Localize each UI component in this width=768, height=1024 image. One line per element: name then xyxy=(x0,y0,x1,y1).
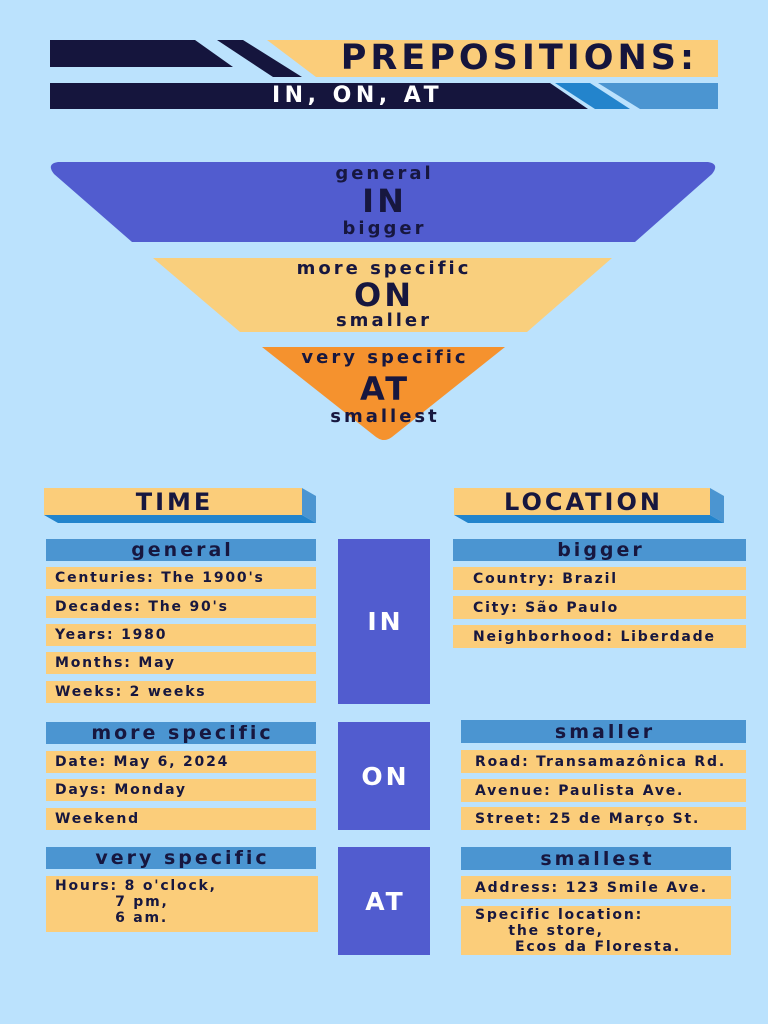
ON location block: Road: Transamazônica Rd. xyxy=(475,754,726,770)
AT location block: Specific location: the store, Ecos da Floresta. xyxy=(475,907,681,955)
funnel: ON: smaller xyxy=(336,310,432,331)
AT location block: Address: 123 Smile Ave. xyxy=(475,880,708,896)
AT column xyxy=(338,847,430,955)
AT column: AT xyxy=(365,886,406,916)
IN column xyxy=(338,539,430,704)
funnel: AT xyxy=(262,347,505,440)
IN time block: Months: May xyxy=(55,655,176,671)
funnel: IN: bigger xyxy=(343,218,426,239)
ON location block: smaller xyxy=(555,720,655,742)
ON column xyxy=(338,722,430,830)
IN location block xyxy=(453,539,746,648)
funnel: ON xyxy=(153,258,612,332)
title text: PREPOSITIONS: xyxy=(341,38,698,78)
header: TIME: TIME xyxy=(136,488,213,516)
IN time block: Centuries: The 1900's xyxy=(55,570,265,586)
IN column: IN xyxy=(367,607,404,636)
funnel: IN: general xyxy=(335,163,434,184)
AT time block xyxy=(46,847,318,932)
ON location block: Avenue: Paulista Ave. xyxy=(475,782,684,798)
ON time block: Weekend xyxy=(55,811,140,827)
IN location block: bigger xyxy=(557,539,645,561)
funnel: AT: AT xyxy=(360,370,410,408)
AT location block xyxy=(461,847,731,955)
IN time block: Decades: The 90's xyxy=(55,599,229,615)
header: TIME xyxy=(44,488,316,523)
ON time block: Days: Monday xyxy=(55,782,187,798)
ON time block: Date: May 6, 2024 xyxy=(55,754,229,770)
ON location block: Street: 25 de Março St. xyxy=(475,810,700,826)
IN time block: Years: 1980 xyxy=(55,627,167,643)
funnel: ON: ON xyxy=(354,276,414,314)
funnel: IN xyxy=(50,162,716,242)
ON location block xyxy=(461,720,746,830)
AT time block: very specific xyxy=(95,847,270,869)
subtitle: IN, ON, AT xyxy=(272,83,443,108)
title banner xyxy=(50,38,718,109)
ON column: ON xyxy=(361,762,410,790)
IN time block xyxy=(46,539,316,703)
IN time block: Weeks: 2 weeks xyxy=(55,684,206,700)
ON time block: more specific xyxy=(91,722,274,744)
funnel: AT: very specific xyxy=(301,347,469,368)
AT location block: smallest xyxy=(540,848,655,870)
IN time block: general xyxy=(131,539,234,561)
IN location block: Neighborhood: Liberdade xyxy=(473,628,716,644)
header: LOCATION xyxy=(454,488,724,523)
funnel: ON: more specific xyxy=(297,258,471,279)
header: LOCATION: LOCATION xyxy=(504,488,663,516)
funnel: AT: smallest xyxy=(330,406,440,427)
IN location block: City: São Paulo xyxy=(473,600,619,616)
IN location block: Country: Brazil xyxy=(473,570,618,586)
AT time block: Hours: 8 o'clock, 7 pm, 6 am. xyxy=(55,878,217,926)
ON time block xyxy=(46,722,316,830)
funnel: IN: IN xyxy=(362,182,407,220)
